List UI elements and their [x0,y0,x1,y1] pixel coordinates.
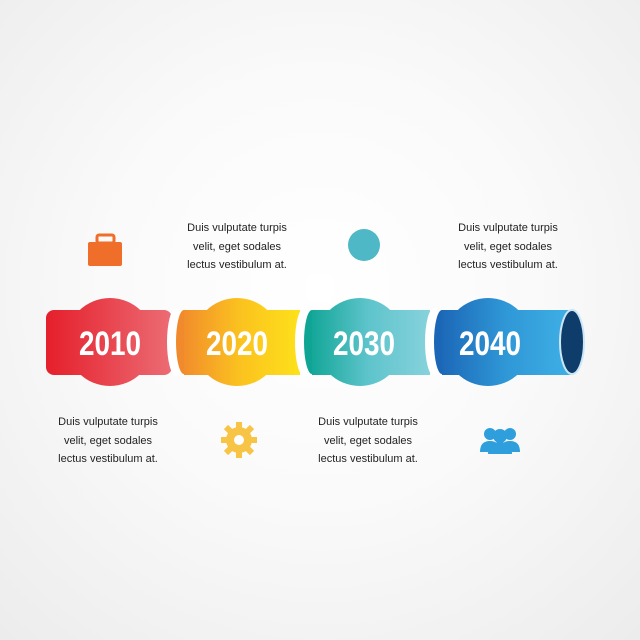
text: 2040: lectus vestibulum at. [458,259,558,271]
icon: briefcase [88,235,122,266]
icon: teal circle [348,229,380,261]
years: 2010 [79,325,141,363]
segment 2010 [46,298,172,386]
text: 2040: Duis vulputate turpis [458,222,558,234]
text: 2010: lectus vestibulum at. [58,453,158,465]
segment 2040 [434,298,584,386]
years: 2040 [459,325,521,363]
years [79,325,521,363]
text: 2040 [458,222,558,271]
text: 2030: Duis vulputate turpis [318,416,418,428]
text: 2040: velit, eget sodales [464,240,552,252]
icon: gear [221,422,257,458]
text: 2030: lectus vestibulum at. [318,453,418,465]
segment 2030 [304,298,430,386]
years: 2020 [206,325,268,363]
text: 2020: Duis vulputate turpis [187,222,287,234]
years: 2030 [333,325,395,363]
text: 2010 [58,416,158,465]
text: 2020: lectus vestibulum at. [187,259,287,271]
text: 2010: velit, eget sodales [64,434,152,446]
segment 2020 [176,298,300,386]
text: 2030 [318,416,418,465]
text: 2010: Duis vulputate turpis [58,416,158,428]
text: 2020: velit, eget sodales [193,240,281,252]
text: 2020 [187,222,287,271]
icon: people [480,428,520,454]
text: 2030: velit, eget sodales [324,434,412,446]
